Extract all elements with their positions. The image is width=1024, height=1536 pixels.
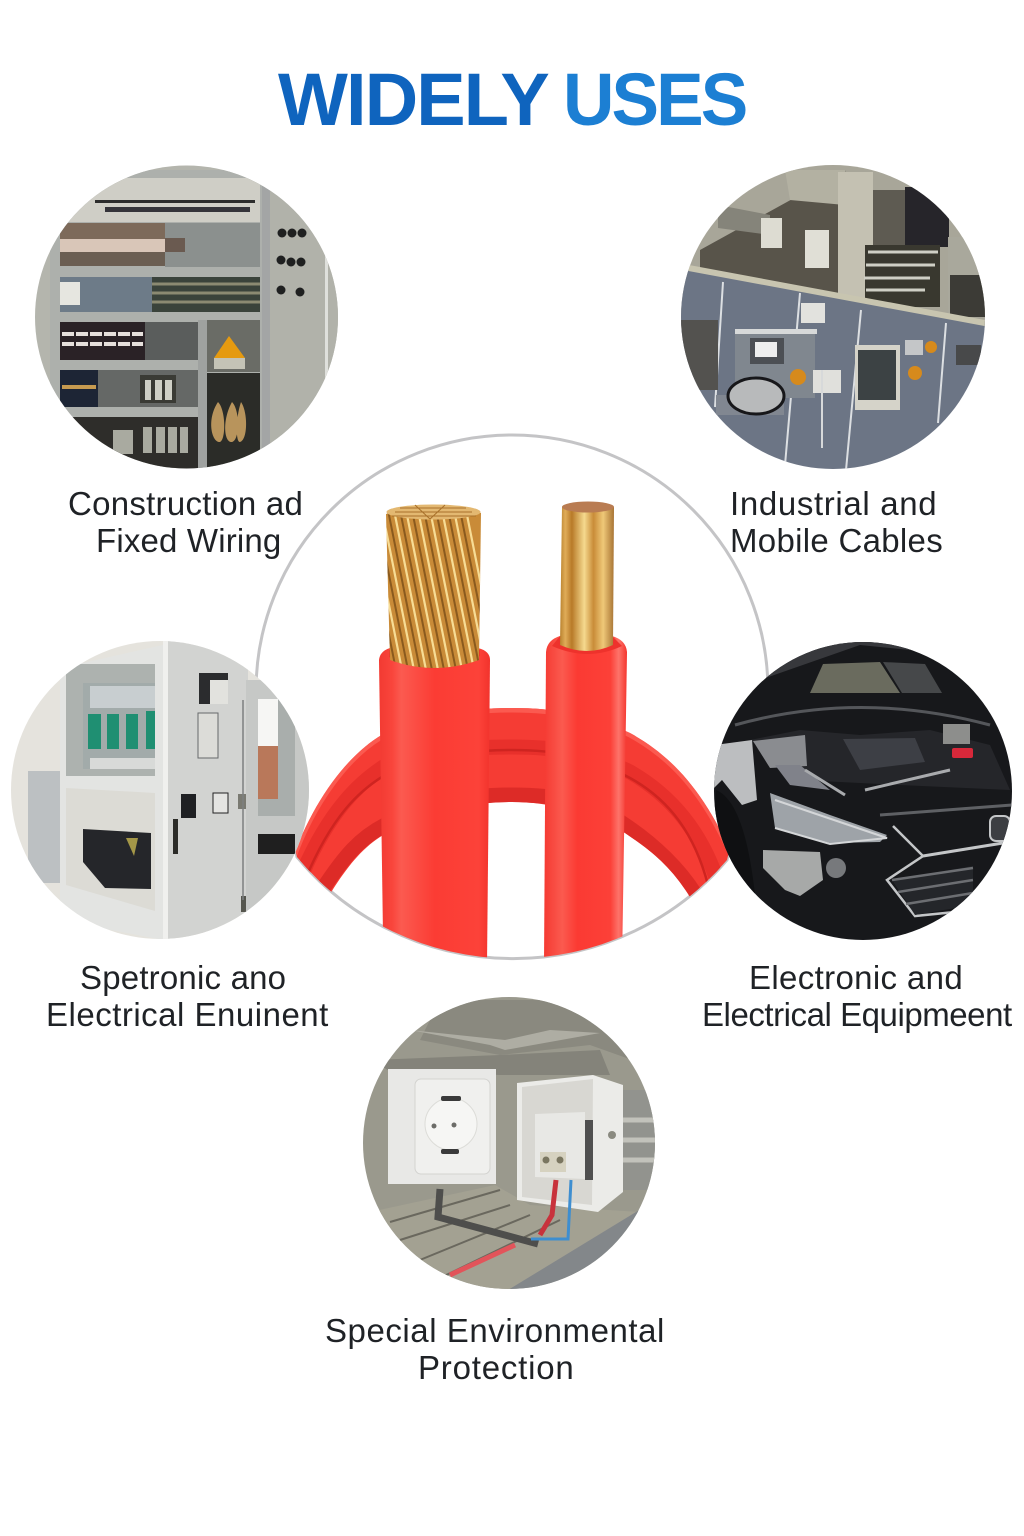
label: electronic: Electrical Equipmeent: [702, 996, 1012, 1033]
label: special: Special Environmental: [325, 1312, 665, 1349]
title: [278, 58, 746, 141]
label: spetronic: Spetronic ano: [80, 959, 286, 996]
photo: switchgear: [678, 160, 990, 480]
label: spetronic: Electrical Enuinent: [46, 996, 329, 1033]
stranded copper conductor: [386, 504, 481, 668]
label: construction: Fixed Wiring: [96, 522, 281, 559]
label: spetronic: [46, 959, 329, 1033]
label: electronic: Electronic and: [749, 959, 963, 996]
label: special: [325, 1312, 665, 1386]
solid wire jacket: [544, 636, 627, 965]
label: electronic: [702, 959, 1012, 1033]
central wire circle: [256, 435, 768, 965]
label: industrial: Mobile Cables: [730, 522, 943, 559]
illustration layer: [11, 165, 1012, 1289]
photo: control cabinet: [30, 160, 345, 475]
red cable coil: [296, 708, 728, 896]
thick wire jacket: [379, 648, 490, 965]
label: industrial: [730, 485, 943, 559]
photo: electrical cabinet: [8, 636, 316, 941]
label: industrial: Industrial and: [730, 485, 937, 522]
title: WIDELY: [278, 58, 548, 141]
label: construction: Construction ad: [68, 485, 303, 522]
photo: socket installation: [358, 992, 665, 1295]
label: construction: [68, 485, 303, 559]
label: special: Protection: [418, 1349, 575, 1386]
solid copper conductor: [560, 502, 614, 651]
photo: car engine: [710, 636, 1016, 946]
title: USES: [563, 58, 745, 141]
